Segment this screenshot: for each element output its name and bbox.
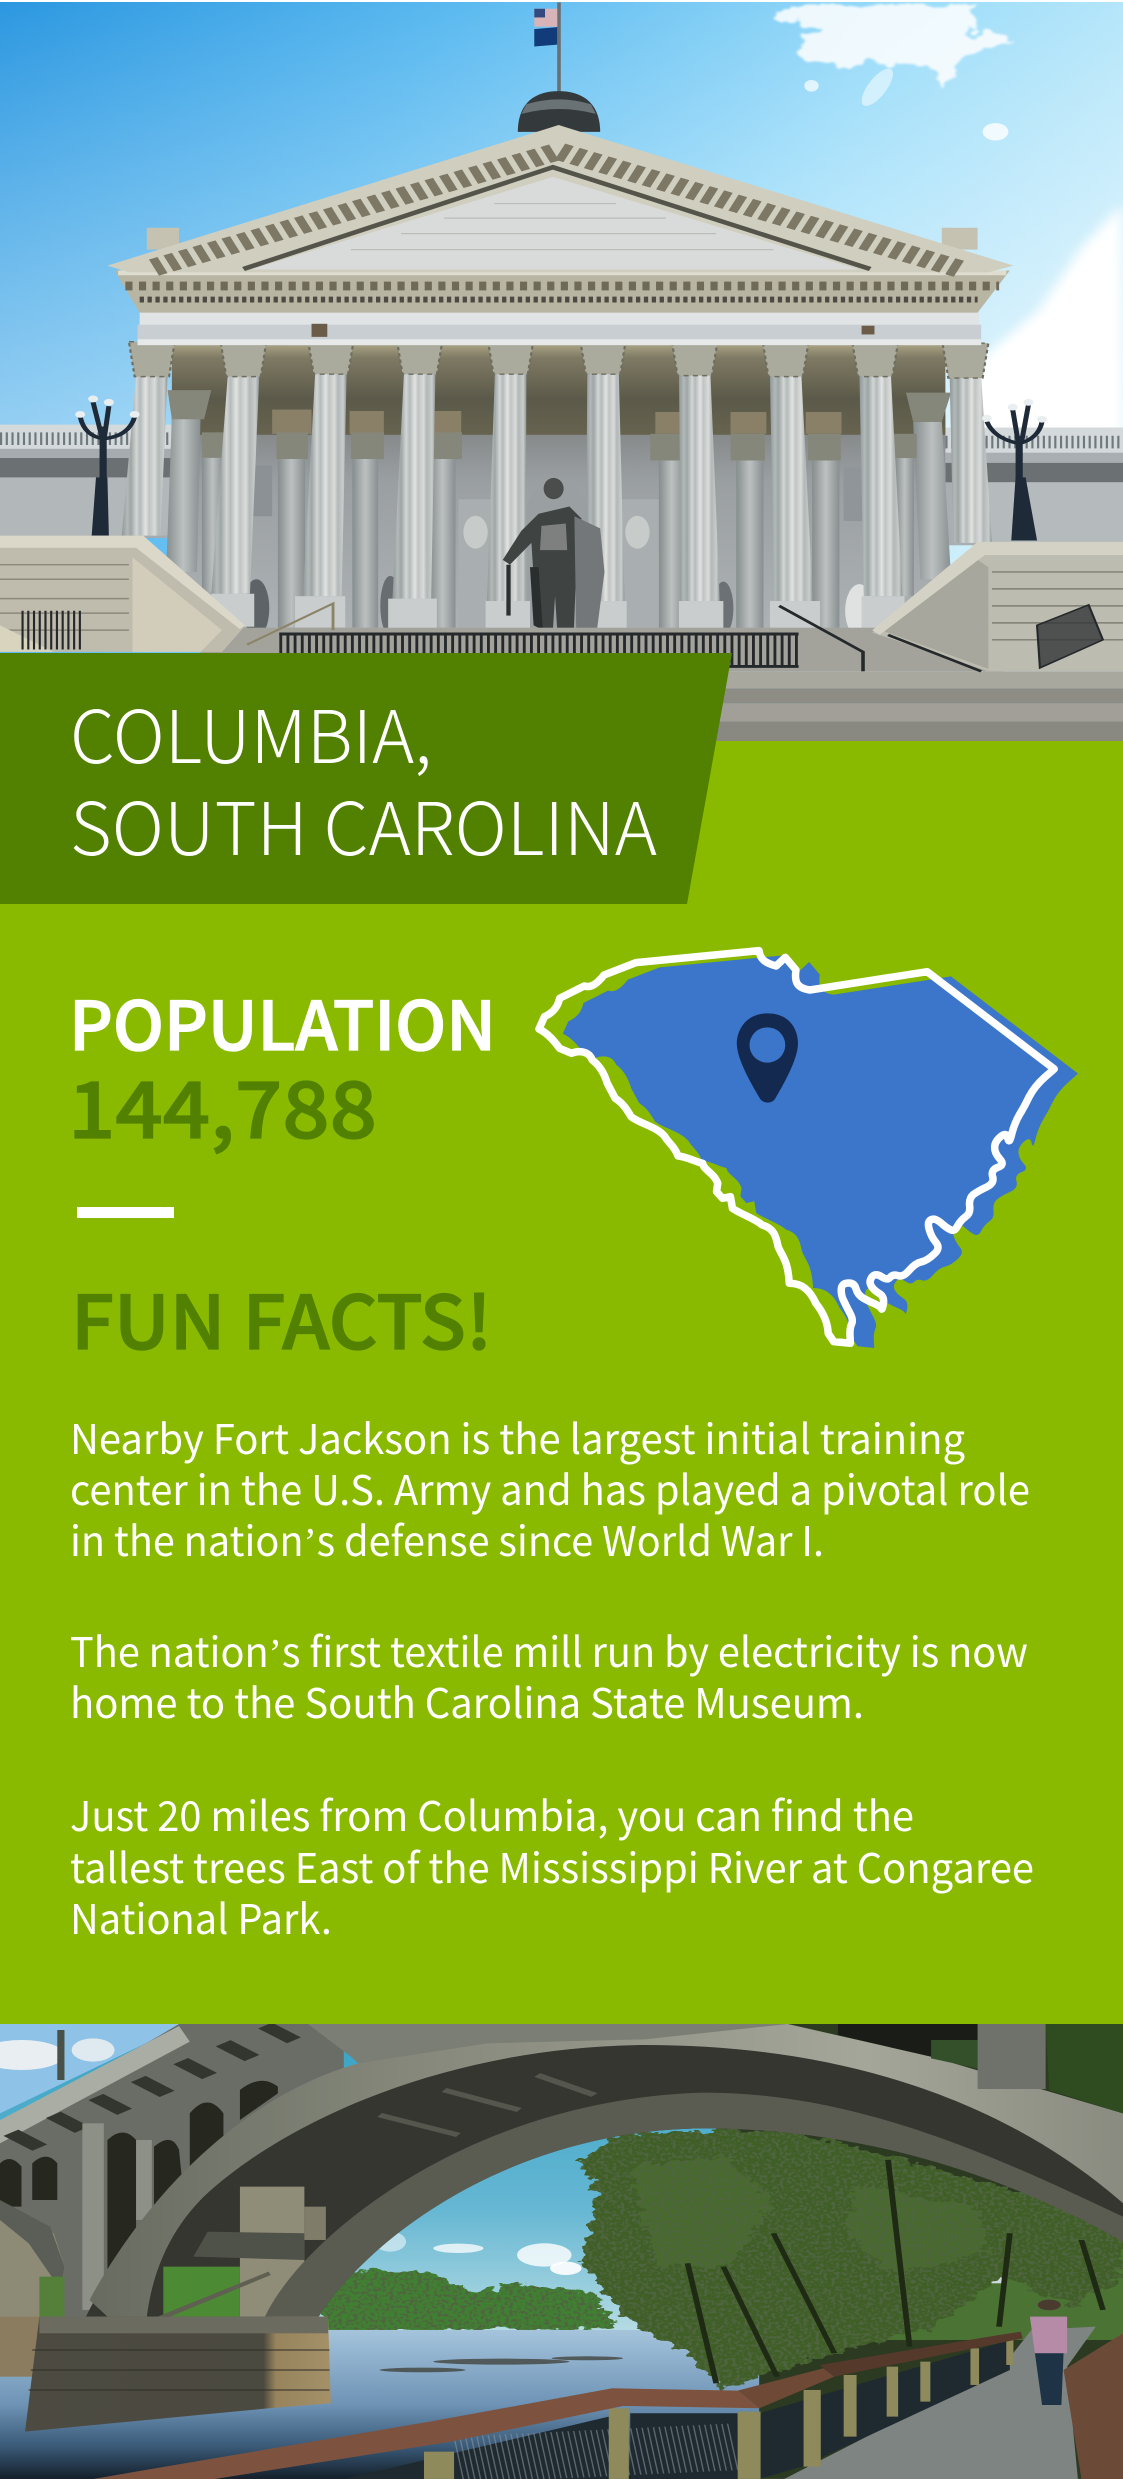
hero photo: South Carolina State House	[0, 0, 1123, 746]
title banner: SOUTH CAROLINA	[70, 771, 657, 877]
stair blocks	[0, 536, 1123, 671]
front colonnade	[122, 339, 992, 631]
population label: POPULATION	[69, 973, 496, 1070]
dome	[518, 91, 600, 132]
inner arch rib	[265, 2093, 1123, 2317]
wall reliefs	[244, 465, 874, 637]
left sky corner	[0, 2024, 186, 2113]
title banner	[0, 653, 732, 904]
bridge pier	[25, 2317, 331, 2432]
river walk deck	[784, 2327, 1096, 2479]
fact 1: center in the U.S. Army and has played a pivotal role	[70, 1457, 1030, 1517]
spandrel columns	[158, 2075, 594, 2318]
state shape	[563, 955, 1078, 1348]
fact 2: The nation’s first textile mill run by electricity is now	[70, 1619, 1028, 1679]
fact 2: home to the South Carolina State Museum.	[70, 1670, 864, 1730]
fact 3: Just 20 miles from Columbia, you can find the	[70, 1783, 914, 1843]
river	[0, 2330, 759, 2479]
fact 3: National Park.	[70, 1886, 332, 1946]
clouds	[375, 2232, 582, 2275]
base background	[0, 2024, 1123, 2479]
fact 2	[70, 1619, 1028, 1730]
rock islands	[380, 2356, 623, 2372]
side wings	[0, 425, 1123, 545]
fact 3	[70, 1783, 1034, 1946]
map of South Carolina	[539, 951, 1078, 1348]
bridge tower at top right	[838, 2024, 1123, 2113]
lamp posts	[75, 396, 1047, 540]
far tree line	[319, 2271, 616, 2333]
divider bar	[77, 1207, 174, 1218]
rear wall	[172, 417, 945, 633]
population number: 144,788	[68, 1049, 377, 1161]
fun facts heading: FUN FACTS!	[71, 1264, 492, 1371]
state outline	[539, 951, 1054, 1343]
green background panel	[0, 741, 1123, 2024]
fact 3: tallest trees East of the Mississippi River at Congaree	[70, 1835, 1034, 1895]
flag and pole	[534, 2, 561, 92]
sky under arch	[0, 2024, 716, 2334]
riverside trees	[580, 2130, 1123, 2390]
iron railings	[21, 603, 1103, 671]
boardwalk railing	[93, 2332, 1023, 2479]
portico ceiling	[172, 345, 945, 435]
arch underside	[86, 2037, 1123, 2317]
statue of George Washington	[502, 478, 604, 628]
fact 1	[70, 1406, 1030, 1568]
bridge deck top	[308, 2024, 787, 2064]
bottom photo: Gervais Street Bridge and river walk	[0, 2024, 1123, 2479]
right railing	[1064, 2333, 1123, 2479]
person walking	[1030, 2300, 1067, 2405]
fact 1: Nearby Fort Jackson is the largest initial training	[70, 1406, 965, 1466]
main arch face	[90, 2024, 1123, 2317]
title banner: COLUMBIA,	[70, 679, 432, 785]
pediment	[107, 125, 1013, 272]
sky	[0, 0, 1123, 746]
icon: location pin	[737, 1013, 798, 1103]
fact 1: in the nation’s defense since World War I.	[70, 1508, 824, 1568]
entablature	[115, 270, 1010, 345]
stone steps	[201, 628, 1123, 742]
bridge arcade	[0, 2024, 344, 2377]
clouds	[777, 5, 1123, 436]
rear columns	[166, 390, 951, 630]
